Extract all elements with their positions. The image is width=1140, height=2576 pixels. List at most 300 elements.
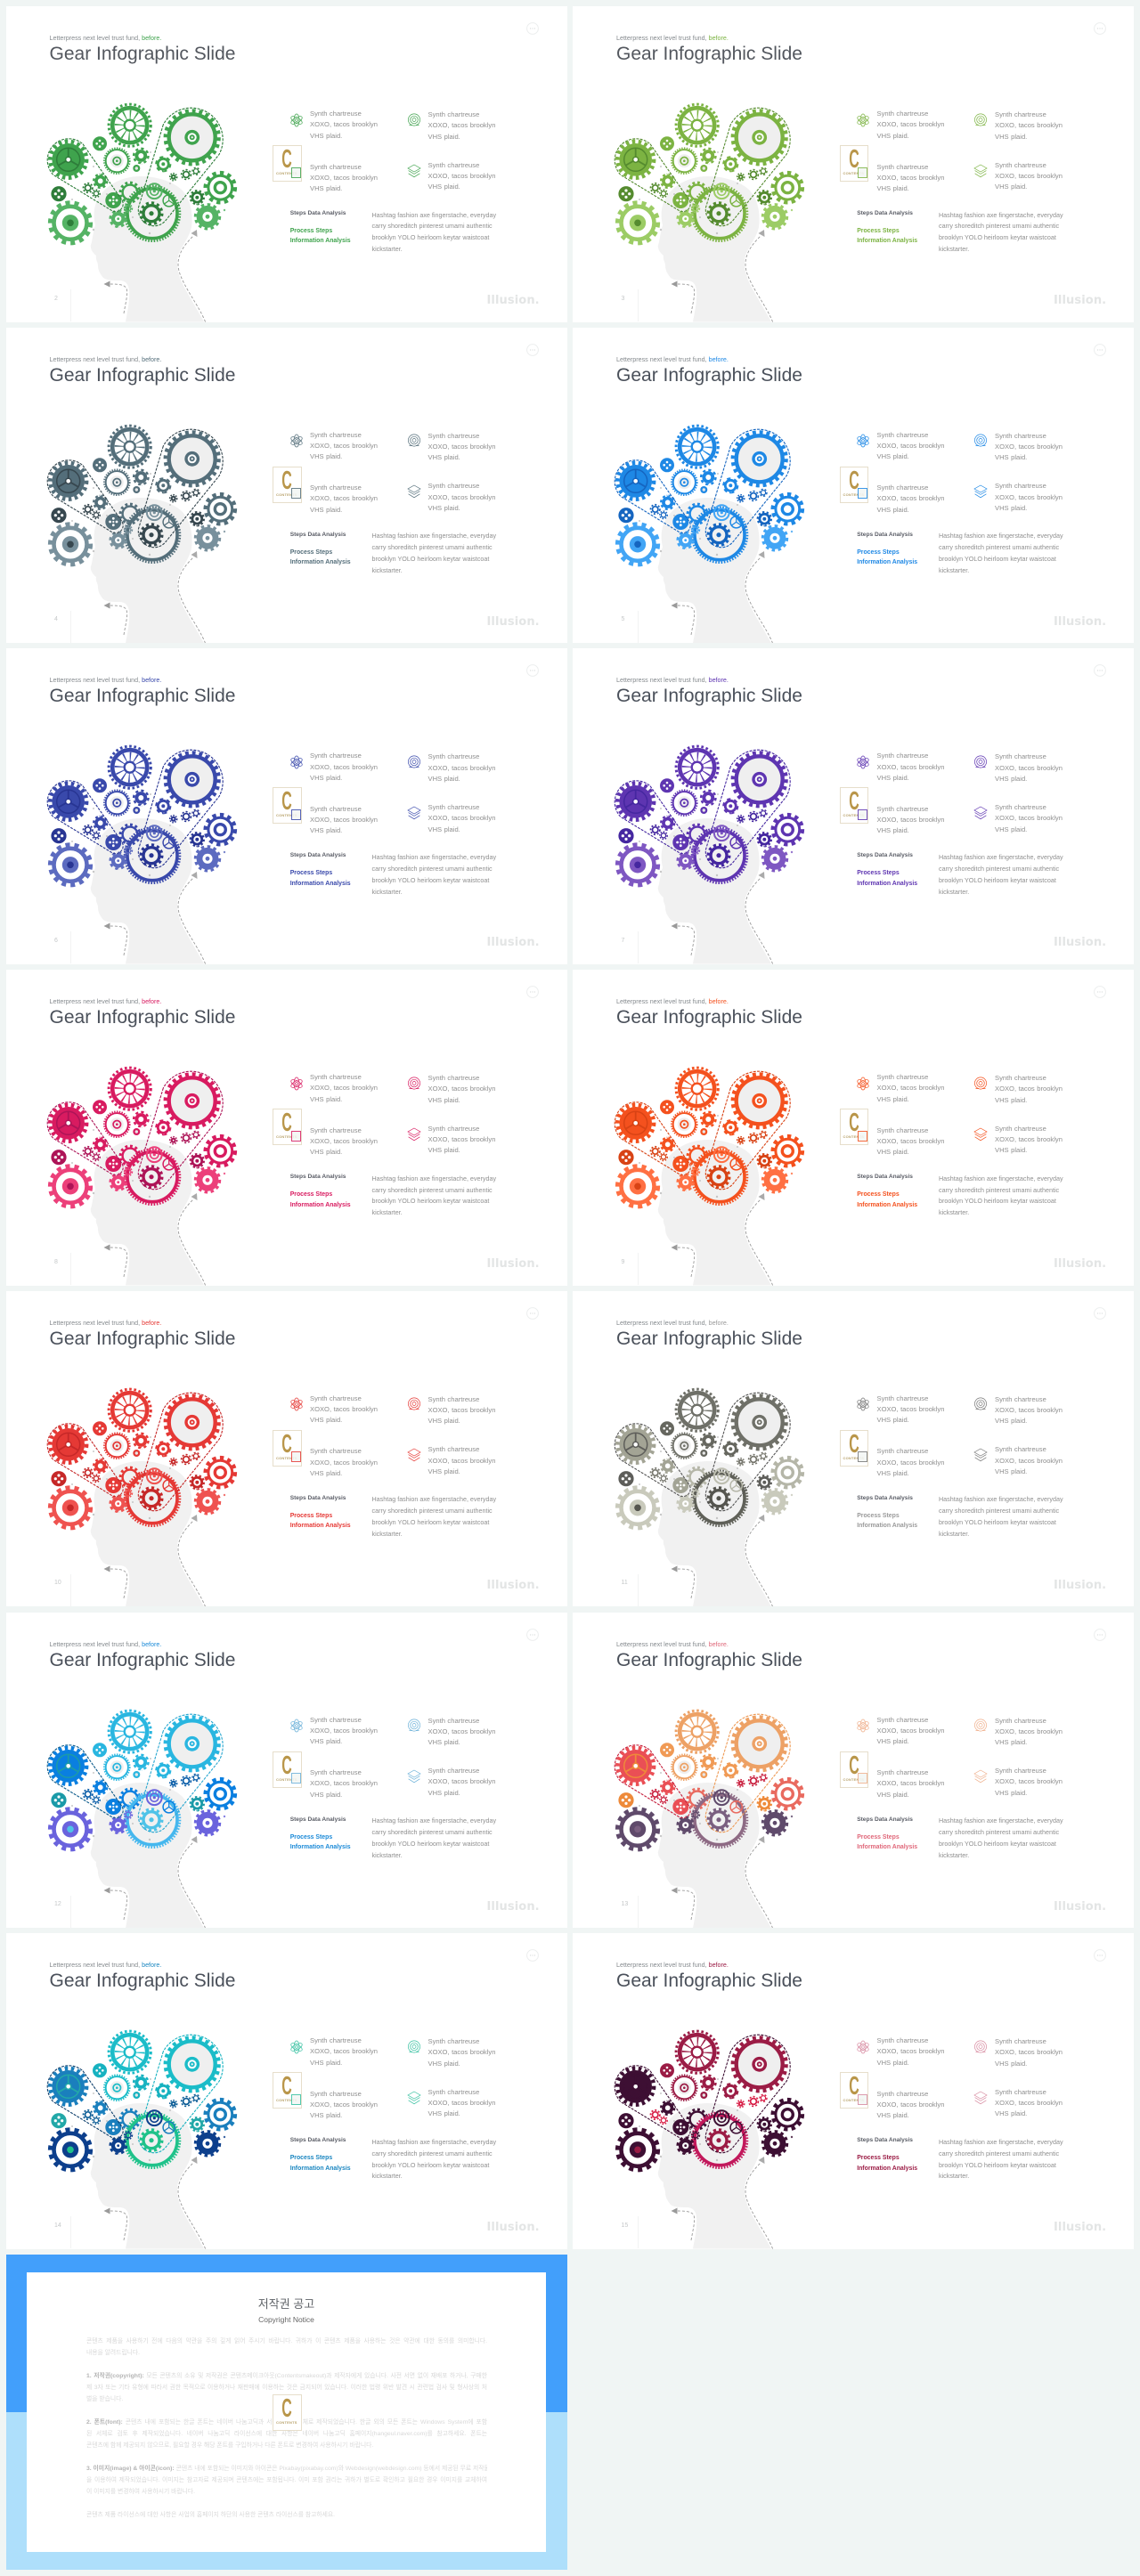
feature text 1 [310, 751, 378, 784]
feature text 3: Synth chartreuse [876, 162, 928, 171]
brand: Illusion. [486, 936, 540, 949]
process labels: Process Steps [857, 228, 900, 234]
feature text 4 [428, 1124, 495, 1157]
feature text 4: VHS plaid. [428, 1789, 460, 1797]
paragraph: kickstarter. [372, 1852, 403, 1859]
gear head illustration [607, 1044, 830, 1286]
paragraph: kickstarter. [939, 567, 969, 574]
feature text 2: Synth chartreuse [428, 1395, 479, 1403]
page number: 8 [54, 1259, 58, 1265]
feature text 2 [428, 2036, 495, 2069]
feature text 4: VHS plaid. [428, 1146, 460, 1154]
icon: atom [289, 755, 303, 769]
paragraph: brooklyn YOLO heirloom keytar waistcoat [372, 1198, 489, 1205]
process labels [290, 1832, 351, 1852]
feature text 1: Synth chartreuse [876, 1073, 928, 1081]
feature text 3: VHS plaid. [876, 184, 909, 192]
process labels: Process Steps [857, 2155, 900, 2161]
icon: menu dots [526, 22, 539, 35]
feature text 3 [876, 1767, 944, 1800]
feature text 4: Synth chartreuse [428, 803, 479, 811]
subtitle: Letterpress next level trust fund, before. [50, 1962, 161, 1969]
feature text 1: Synth chartreuse [310, 1394, 362, 1402]
feature text 3: Synth chartreuse [876, 484, 928, 492]
feature text 2: VHS plaid. [995, 775, 1027, 783]
paragraph: Hashtag fashion axe fingerstache, everyday [372, 532, 496, 540]
icon: target [406, 755, 420, 769]
icon: layers [408, 484, 420, 499]
title: Gear Infographic Slide [50, 44, 235, 64]
feature text 4: XOXO, tacos brooklyn [428, 493, 495, 501]
logo placeholder [273, 1751, 301, 1788]
feature text 1: XOXO, tacos brooklyn [876, 442, 944, 450]
feature text 4: VHS plaid. [428, 2109, 460, 2117]
page number: 5 [622, 616, 624, 622]
paragraph: Hashtag fashion axe fingerstache, everyday [372, 1175, 496, 1182]
process labels [857, 2153, 917, 2174]
logo placeholder: C [849, 787, 859, 816]
feature text 4: XOXO, tacos brooklyn [428, 1777, 495, 1785]
icon: atom [856, 2040, 870, 2054]
title: Gear Infographic Slide [50, 1007, 235, 1028]
feature text 2: VHS plaid. [995, 453, 1027, 461]
feature text 1: Synth chartreuse [310, 1073, 362, 1081]
steps heading: Steps Data Analysis [857, 1174, 913, 1180]
feature text 1: VHS plaid. [310, 452, 342, 460]
paragraph: brooklyn YOLO heirloom keytar waistcoat [372, 877, 489, 884]
paragraph: carry shoreditch pinterest umami authentic [939, 1186, 1059, 1193]
panel: slide 10 red [5, 1291, 566, 1606]
copyright body text: 을 이용하여 제작되었습니다. 이미지는 참고자료 제공되며 콘텐츠에는 포함됩니다. 이미 포함 권리는 귀하가 별도로 확인하고 필요한 경우 이미지를 교체하여 [86, 2477, 487, 2483]
process labels: Process Steps [290, 1513, 332, 1519]
paragraph: carry shoreditch pinterest umami authentic [372, 544, 493, 551]
process labels: Process Steps [857, 870, 900, 876]
feature text 2: XOXO, tacos brooklyn [428, 443, 495, 451]
copyright body text: 제 3자 또는 기타 유형에 따라서 권한 목적으로 이용하거나 재판매에 이용하는 것은 금지되어 있습니다. 이러한 법령 위반 발견 시 관련법 검사 및 형사상의 처 [86, 2385, 487, 2391]
feature text 1: Synth chartreuse [876, 752, 928, 760]
icon: atom [856, 755, 870, 769]
title: Gear Infographic Slide [50, 1649, 235, 1670]
brand: Illusion. [486, 615, 540, 629]
feature text 2: Synth chartreuse [428, 1717, 479, 1724]
gear head illustration [607, 1686, 830, 1928]
process labels: Information Analysis [857, 2166, 917, 2172]
process labels: Information Analysis [290, 559, 351, 565]
feature text 4 [428, 482, 495, 512]
paragraph: kickstarter. [372, 2173, 403, 2180]
feature text 3: XOXO, tacos brooklyn [876, 174, 944, 182]
paragraph: brooklyn YOLO heirloom keytar waistcoat [939, 1198, 1056, 1205]
feature text 4: Synth chartreuse [995, 1445, 1046, 1453]
panel: slide 6 indigo [5, 648, 566, 964]
feature text 1 [876, 1715, 944, 1747]
panel: slide 14 teal and navy [5, 1933, 566, 2249]
process labels: Information Analysis [857, 1844, 917, 1850]
copyright body text: 콘텐츠 제품을 사용하기 전에 다음의 약관을 주의 깊게 읽어 주시기 바랍니다. 귀하가 이 콘텐츠 제품을 사용하는 것은 약관에 대한 동의를 의미합니다. [86, 2338, 487, 2344]
logo placeholder: C [849, 145, 859, 174]
logo placeholder: CONTENTS [276, 2098, 297, 2102]
icon: target [408, 435, 420, 447]
feature text 4 [995, 481, 1063, 514]
paragraph [372, 532, 496, 574]
process labels [290, 868, 351, 889]
paragraph: kickstarter. [372, 889, 403, 896]
icon: atom [856, 1077, 870, 1091]
paragraph: carry shoreditch pinterest umami authentic [372, 1186, 493, 1193]
feature text 2: XOXO, tacos brooklyn [428, 1085, 495, 1093]
feature text 2: VHS plaid. [995, 133, 1027, 141]
icon: atom [289, 1077, 303, 1091]
feature text 4: Synth chartreuse [995, 803, 1046, 811]
page number: 13 [622, 1901, 628, 1907]
paragraph: Hashtag fashion axe fingerstache, everyday [939, 1496, 1063, 1503]
feature text 2 [428, 1073, 495, 1106]
logo placeholder: CONTENTS [276, 813, 297, 817]
feature text 2 [995, 1073, 1063, 1106]
feature text 3: VHS plaid. [310, 2111, 342, 2119]
feature text 2: XOXO, tacos brooklyn [995, 1727, 1063, 1735]
feature text 3: XOXO, tacos brooklyn [310, 494, 378, 502]
icon: layers [973, 1769, 988, 1784]
brand: Illusion. [486, 1900, 540, 1913]
feature text 3: XOXO, tacos brooklyn [310, 816, 378, 824]
feature text 1 [876, 430, 944, 463]
feature text 2: VHS plaid. [995, 1417, 1027, 1425]
paragraph: Hashtag fashion axe fingerstache, everyday [939, 532, 1063, 540]
copyright body text: 이 이미지를 변경하여 사용하시기 바랍니다. [86, 2489, 195, 2495]
process labels: Process Steps [290, 549, 332, 556]
feature text 1: XOXO, tacos brooklyn [876, 2047, 944, 2055]
feature text 4 [995, 802, 1063, 835]
icon: menu dots [1094, 986, 1106, 998]
feature text 2: XOXO, tacos brooklyn [428, 764, 495, 772]
panel: slide 9 deep orange [573, 970, 1134, 1286]
icon: layers [406, 1127, 420, 1142]
logo placeholder: CONTENTS [276, 492, 297, 497]
feature text 3: Synth chartreuse [310, 2090, 362, 2098]
feature text 4: XOXO, tacos brooklyn [995, 1135, 1063, 1143]
feature text 1 [310, 110, 378, 140]
paragraph: Hashtag fashion axe fingerstache, everyday [372, 1496, 496, 1503]
icon: layers [973, 1127, 988, 1142]
feature text 4: Synth chartreuse [428, 161, 479, 169]
feature text 2: XOXO, tacos brooklyn [428, 121, 495, 129]
icon: target [973, 1397, 988, 1411]
paragraph: carry shoreditch pinterest umami authentic [939, 2150, 1059, 2158]
copyright body text: 콘텐츠에 함께 제공되지 않으므로, 필요할 경우 해당 폰트를 구입하거나 다른 폰트로 변경하여 사용하시기 바랍니다. [86, 2442, 373, 2449]
paragraph: brooklyn YOLO heirloom keytar waistcoat [372, 2162, 489, 2169]
feature text 4: VHS plaid. [995, 504, 1027, 512]
brand: Illusion. [486, 1257, 540, 1271]
logo placeholder [839, 145, 868, 182]
page number: 7 [622, 938, 624, 944]
subtitle: Letterpress next level trust fund, before. [50, 356, 161, 363]
feature text 2 [995, 1715, 1063, 1748]
feature text 3 [310, 1446, 378, 1479]
feature text 4 [428, 2087, 495, 2120]
logo placeholder [273, 2072, 301, 2109]
process labels: Process Steps [857, 1513, 900, 1519]
brand: Illusion. [486, 1579, 540, 1592]
feature text 3: VHS plaid. [310, 184, 342, 192]
gear head illustration [615, 424, 805, 643]
feature text 2: VHS plaid. [428, 1417, 460, 1425]
feature text 4: VHS plaid. [995, 1146, 1027, 1154]
feature text 2: Synth chartreuse [995, 1395, 1046, 1403]
feature text 4: XOXO, tacos brooklyn [428, 2099, 495, 2107]
logo placeholder: C [849, 467, 859, 495]
logo placeholder [839, 787, 868, 824]
icon: target [406, 2040, 420, 2054]
paragraph: brooklyn YOLO heirloom keytar waistcoat [939, 877, 1056, 884]
feature text 3 [310, 1125, 378, 1158]
feature text 4: VHS plaid. [428, 504, 460, 512]
logo placeholder [839, 1751, 868, 1788]
feature text 1 [310, 1715, 378, 1747]
paragraph: carry shoreditch pinterest umami authentic [372, 2150, 493, 2158]
feature text 1: VHS plaid. [876, 1095, 909, 1103]
copyright body text: 내용을 알려드립니다. [86, 2350, 140, 2356]
feature text 3 [876, 804, 944, 837]
subtitle: Letterpress next level trust fund, before. [616, 356, 729, 363]
feature text 3: Synth chartreuse [310, 162, 362, 171]
panel: slide 8 pink [5, 970, 566, 1286]
logo placeholder: C [281, 2072, 292, 2101]
paragraph: kickstarter. [372, 246, 403, 253]
logo placeholder [273, 787, 301, 824]
title: Gear Infographic Slide [50, 1971, 235, 1991]
subtitle: Letterpress next level trust fund, before. [616, 1320, 729, 1327]
icon: menu dots [1094, 664, 1106, 677]
feature text 4 [995, 1124, 1063, 1157]
feature text 2: Synth chartreuse [428, 752, 479, 760]
feature text 2: XOXO, tacos brooklyn [995, 764, 1063, 772]
feature text 3 [876, 162, 944, 192]
process labels [857, 228, 917, 244]
logo placeholder: C [281, 467, 292, 495]
feature text 4: Synth chartreuse [428, 1767, 479, 1775]
gear head illustration [41, 1365, 264, 1606]
title: Gear Infographic Slide [616, 1649, 802, 1670]
feature text 2: XOXO, tacos brooklyn [995, 1085, 1063, 1093]
feature text 3: VHS plaid. [310, 1148, 342, 1156]
paragraph: brooklyn YOLO heirloom keytar waistcoat [372, 1841, 489, 1848]
feature text 3: VHS plaid. [310, 826, 342, 834]
feature text 3: VHS plaid. [876, 506, 909, 514]
icon: target [973, 2040, 988, 2054]
process labels [290, 549, 351, 565]
feature text 1: Synth chartreuse [876, 1394, 928, 1402]
icon: menu dots [526, 986, 539, 998]
feature text 1: VHS plaid. [310, 1416, 342, 1424]
paragraph: kickstarter. [939, 1531, 969, 1538]
feature text 3: Synth chartreuse [310, 1768, 362, 1776]
feature text 4: Synth chartreuse [995, 482, 1046, 490]
icon: target [406, 1077, 420, 1091]
paragraph [939, 531, 1063, 577]
paragraph: carry shoreditch pinterest umami authentic [939, 223, 1059, 230]
paragraph: Hashtag fashion axe fingerstache, everyday [939, 212, 1063, 219]
feature text 1: XOXO, tacos brooklyn [876, 120, 944, 128]
feature text 2: Synth chartreuse [428, 110, 479, 118]
process labels [857, 548, 917, 568]
feature text 1 [876, 1394, 944, 1426]
paragraph [939, 212, 1063, 253]
logo placeholder: C [281, 1751, 292, 1779]
feature text 3 [876, 2089, 944, 2122]
feature text 2: XOXO, tacos brooklyn [995, 2048, 1063, 2056]
feature text 2: XOXO, tacos brooklyn [428, 2048, 495, 2056]
logo placeholder: CONTENTS [276, 171, 297, 175]
logo placeholder: CONTENTS [843, 1456, 864, 1460]
page number: 14 [54, 2223, 61, 2229]
feature text 1: XOXO, tacos brooklyn [310, 1084, 378, 1092]
icon: target [973, 434, 988, 448]
process labels [290, 228, 351, 244]
logo placeholder: C [281, 2394, 292, 2423]
process labels: Information Analysis [290, 1844, 351, 1850]
icon: target [408, 114, 420, 126]
logo placeholder: CONTENTS [276, 1456, 297, 1460]
feature text 4: VHS plaid. [995, 1789, 1027, 1797]
process labels: Process Steps [290, 2155, 332, 2161]
title: Gear Infographic Slide [50, 365, 235, 386]
process labels: Process Steps [857, 1191, 900, 1198]
paragraph: Hashtag fashion axe fingerstache, everyday [939, 2139, 1063, 2146]
feature text 2: Synth chartreuse [428, 2037, 479, 2045]
feature text 1 [310, 431, 378, 460]
feature text 2: VHS plaid. [995, 1096, 1027, 1104]
process labels: Information Analysis [290, 1523, 351, 1529]
logo placeholder [273, 467, 301, 503]
page number: 4 [54, 616, 58, 622]
feature text 1 [310, 1072, 378, 1105]
feature text 2: VHS plaid. [428, 2060, 460, 2068]
title: Gear Infographic Slide [616, 1971, 802, 1991]
page number: 15 [622, 2223, 628, 2229]
panel: slide 11 grey [573, 1291, 1134, 1606]
paragraph [939, 852, 1063, 898]
paragraph [939, 1494, 1063, 1540]
copyright body text: 된 서체로 검토 후 제작되었습니다. 네이버 나눔고딕 라이선스에 대한 사항은 네이버 나눔고딕 홈페이지(hangeul.naver.com)를 참고하세요. 폰트는 [86, 2431, 487, 2437]
feature text 4: Synth chartreuse [995, 1125, 1046, 1133]
page number: 12 [54, 1901, 61, 1907]
feature text 1: Synth chartreuse [310, 431, 362, 439]
paragraph: Hashtag fashion axe fingerstache, everyday [939, 1175, 1063, 1182]
process labels [290, 2153, 351, 2174]
feature text 2: VHS plaid. [428, 453, 460, 461]
feature text 2: VHS plaid. [428, 133, 460, 141]
paragraph: kickstarter. [372, 1531, 403, 1538]
logo placeholder: CONTENTS [276, 1134, 297, 1139]
page number: 2 [54, 296, 58, 301]
feature text 1 [876, 2036, 944, 2068]
paragraph: kickstarter. [372, 567, 403, 574]
feature text 1: XOXO, tacos brooklyn [310, 442, 378, 450]
feature text 4: Synth chartreuse [995, 1767, 1046, 1775]
feature text 3: XOXO, tacos brooklyn [310, 174, 378, 182]
process labels: Information Analysis [857, 1202, 917, 1207]
feature text 3: Synth chartreuse [310, 1126, 362, 1134]
feature text 3: XOXO, tacos brooklyn [876, 2101, 944, 2109]
icon: menu dots [526, 344, 539, 356]
gear head illustration [607, 1365, 830, 1606]
icon: atom [290, 114, 303, 126]
feature text 1: VHS plaid. [310, 1737, 342, 1745]
process labels [857, 868, 917, 889]
logo placeholder: C [281, 787, 292, 816]
brand: Illusion. [486, 294, 540, 307]
steps heading: Steps Data Analysis [857, 1816, 913, 1822]
logo placeholder: CONTENTS [843, 2098, 864, 2102]
feature text 3: Synth chartreuse [310, 805, 362, 813]
feature text 4: XOXO, tacos brooklyn [428, 172, 495, 180]
feature text 2 [428, 432, 495, 461]
icon: layers [406, 1448, 420, 1462]
feature text 1: Synth chartreuse [876, 110, 928, 118]
paragraph [372, 1174, 496, 1219]
gear head illustration [615, 103, 805, 322]
feature text 2: XOXO, tacos brooklyn [428, 1727, 495, 1735]
paragraph: kickstarter. [939, 1852, 969, 1859]
paragraph: carry shoreditch pinterest umami authentic [372, 1829, 493, 1836]
process labels: Information Analysis [290, 238, 351, 244]
feature text 1 [876, 751, 944, 784]
paragraph: Hashtag fashion axe fingerstache, everyday [372, 1817, 496, 1824]
logo placeholder: C [849, 2072, 859, 2101]
feature text 4: Synth chartreuse [428, 2088, 479, 2096]
paragraph: carry shoreditch pinterest umami authentic [939, 1829, 1059, 1836]
feature text 1: Synth chartreuse [876, 2036, 928, 2044]
feature text 3: Synth chartreuse [876, 2090, 928, 2098]
brand: Illusion. [1054, 1257, 1106, 1271]
logo placeholder: C [849, 1751, 859, 1779]
steps heading: Steps Data Analysis [290, 852, 346, 858]
steps heading: Steps Data Analysis [857, 532, 913, 538]
logo placeholder [839, 1430, 868, 1467]
feature text 3 [310, 1767, 378, 1800]
feature text 2 [428, 1715, 495, 1748]
paragraph: Hashtag fashion axe fingerstache, everyday [372, 854, 496, 861]
feature text 3 [310, 2089, 378, 2122]
paragraph: kickstarter. [939, 1209, 969, 1216]
process labels [290, 1190, 351, 1210]
feature text 2 [428, 1394, 495, 1427]
feature text 2: XOXO, tacos brooklyn [995, 1406, 1063, 1414]
steps heading: Steps Data Analysis [290, 1816, 346, 1822]
copyright body text: 1. 저작권(copyright): 모든 콘텐츠의 소유 및 저작권은 콘텐츠메이크아웃(Contentsmakeout)과 제작자에게 있습니다. 사전 서면 없이 재배포 하거나, 구매한 [86, 2373, 487, 2379]
feature text 1: XOXO, tacos brooklyn [310, 2047, 378, 2055]
icon: layers [406, 1769, 420, 1784]
panel: slide 3 light green [573, 6, 1134, 322]
process labels: Process Steps [857, 549, 900, 556]
feature text 2: Synth chartreuse [995, 752, 1046, 760]
process labels: Information Analysis [290, 1202, 351, 1207]
icon: target [974, 114, 987, 126]
steps heading: Steps Data Analysis [857, 852, 913, 858]
logo placeholder [273, 2394, 301, 2431]
brand: Illusion. [1054, 936, 1106, 949]
panel: copyright notice [5, 2255, 566, 2570]
title: Gear Infographic Slide [616, 365, 802, 386]
feature text 3: Synth chartreuse [310, 484, 362, 492]
feature text 3: VHS plaid. [876, 1469, 909, 1477]
paragraph [372, 2137, 496, 2182]
gear head illustration [41, 2007, 264, 2249]
feature text 4: Synth chartreuse [428, 1125, 479, 1133]
copyright body text: 벌을 받습니다. [86, 2396, 123, 2402]
feature text 3: XOXO, tacos brooklyn [310, 1779, 378, 1787]
